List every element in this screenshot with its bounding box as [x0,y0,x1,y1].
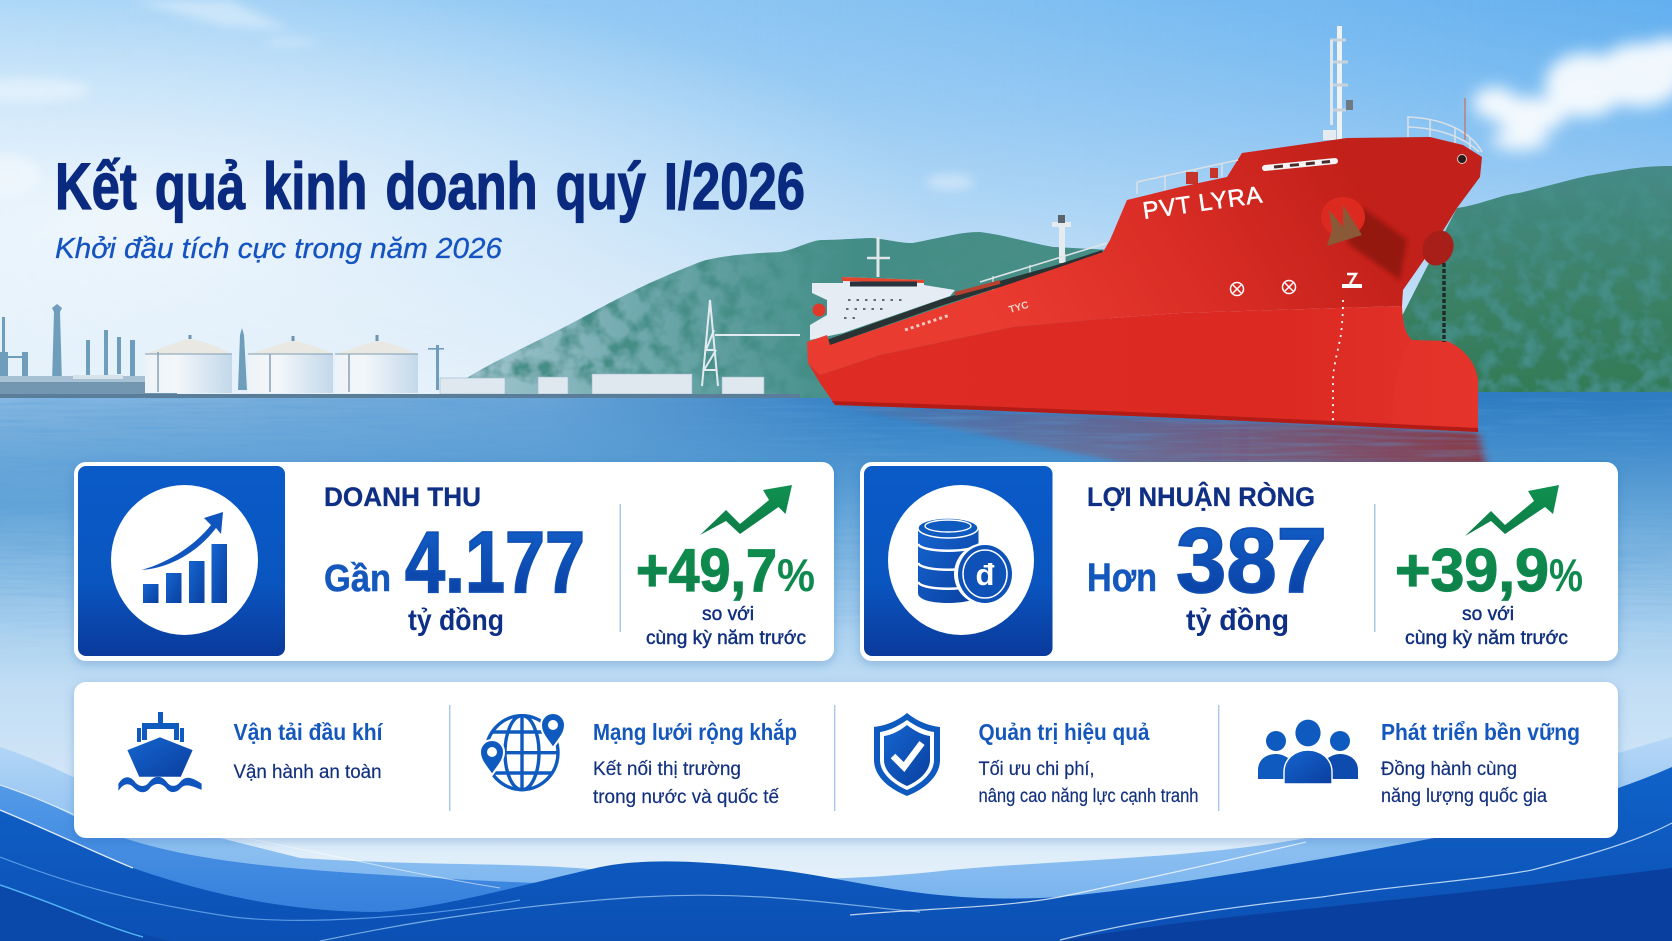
text: oil transport: Vận hành an toàn [234,762,382,783]
text: revenue comparison [646,604,806,649]
icon: people [1258,720,1358,784]
tanker ship PVT LYRA [807,26,1482,432]
icon: coins: đ [976,557,995,592]
text: profit value: 387 [1176,510,1327,612]
ship bow rail [1408,117,1482,152]
text: revenue value: Gần [324,558,391,600]
sea ripples [0,398,1650,611]
clouds at right [1473,38,1672,150]
text: governance: nâng cao năng lực cạnh tranh [978,786,1198,807]
icon: shield [874,713,940,796]
ship bow slot [1265,161,1335,168]
text: network: Mạng lưới rộng khắp [593,718,797,745]
icon: ship [119,712,201,792]
text: profit comparison: so với [1462,604,1514,625]
text: revenue comparison: cùng kỳ năm trước [646,628,806,649]
subtitle: Khởi đầu tích cực trong năm 2026 [55,233,503,265]
heading: net profit: LỢI NHUẬN RÒNG [1087,481,1315,512]
tanker ship PVT LYRA: TYC [1008,300,1030,316]
icon: coins [864,466,1052,656]
distant hills [440,166,1672,398]
text: revenue value: 4.177 [405,514,585,611]
panel: net profit [860,462,1618,661]
text: governance [978,719,1198,807]
arrow: profit growth [1465,485,1559,536]
ship bulb highlight [1392,340,1478,428]
refinery and tanks [0,300,800,398]
text: network [593,718,797,808]
heading: revenue: DOANH THU [324,482,481,512]
text: governance: Tối ưu chi phí, [978,759,1094,780]
ship mast forward [1323,26,1353,140]
text: revenue comparison: so với [702,604,754,625]
text: profit comparison [1405,604,1568,649]
text: profit value: Hơn [1087,556,1157,600]
text: sustainable: Phát triển bền vững [1381,719,1580,745]
ship name: PVT LYRA [1141,182,1264,225]
text: profit comparison: cùng kỳ năm trước [1405,628,1568,649]
icon: globe with pins [480,713,565,790]
ship deck rail and pipes [827,243,1107,343]
ship anchor [1321,197,1407,280]
divider [620,504,621,632]
text: sustainable: năng lượng quốc gia [1381,786,1547,807]
text: revenue value: tỷ đồng [408,604,504,637]
text: oil transport: Vận tải đầu khí [234,719,384,745]
ship markings [1230,274,1362,425]
text: revenue growth: +49,7 [636,537,777,604]
arrow: revenue growth [700,485,792,535]
text: profit value [1087,510,1327,637]
background: sky [0,0,1672,400]
text: profit growth: +39,9 [1395,537,1549,604]
text: governance: Quản trị hiệu quả [978,719,1150,745]
text: revenue value [324,514,585,637]
text: network: Kết nối thị trường [593,759,741,780]
text: oil transport [234,719,384,783]
ship hull rivets [905,315,950,330]
icon: revenue chart [78,466,285,656]
text: network: trong nước và quốc tế [593,787,779,808]
text: sustainable [1381,719,1580,807]
ship reflection [835,405,1486,464]
text: profit growth: % [1549,549,1583,601]
divider [1374,504,1376,632]
bottom background and waves [0,680,1672,941]
text: sustainable: Đồng hành cùng [1381,759,1517,780]
panel: highlights [74,682,1618,838]
ship hull upper [807,137,1482,375]
sea [0,392,1672,654]
ship second mast [1052,215,1071,263]
ship accommodation block [810,237,955,340]
panel: revenue [74,462,834,661]
ship foredeck rail [1137,160,1238,194]
ship hawse blob and chain [1417,225,1459,342]
text: profit value: tỷ đồng [1186,604,1289,637]
text: revenue growth: % [777,549,815,601]
title: Kết quả kinh doanh quý I/2026 [55,149,805,223]
ship hull lower [808,306,1478,432]
